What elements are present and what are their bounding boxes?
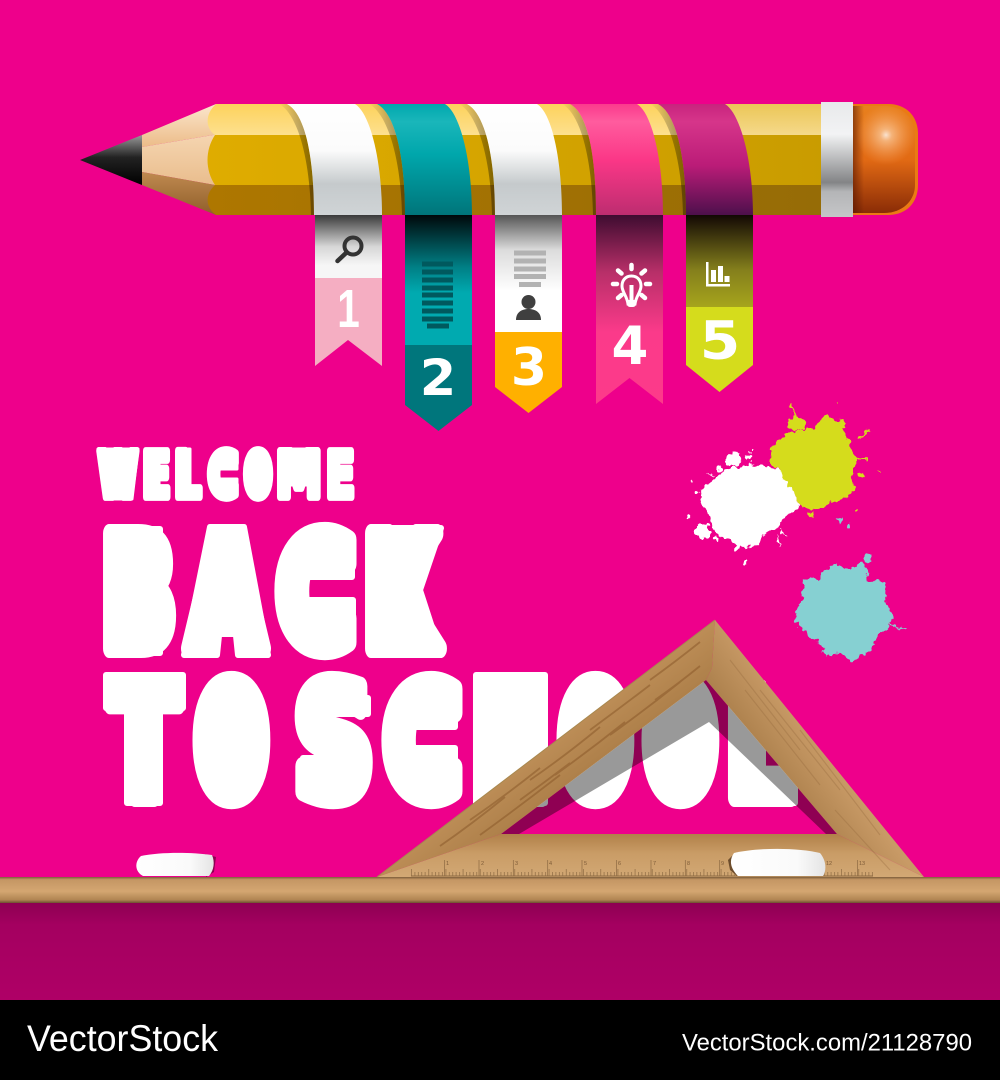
pencil ribbon 3 white — [467, 104, 562, 215]
set square right arm — [706, 620, 924, 877]
ruler numbers: 13 — [859, 861, 865, 867]
pencil ribbon 1 white — [287, 104, 382, 215]
pencil tip wood — [142, 104, 226, 215]
teal splat — [794, 519, 906, 663]
chalk ledge board — [0, 877, 1000, 903]
ruler numbers: 8 — [687, 861, 690, 867]
title text: to school: L — [724, 651, 794, 835]
ruler numbers — [446, 861, 865, 867]
title text: back — [100, 503, 441, 687]
watermark right: VectorStock.com/21128790 — [682, 1030, 972, 1056]
ruler numbers: 6 — [618, 861, 621, 867]
title text: welcome: E — [326, 439, 355, 512]
title text: back: A — [187, 504, 266, 687]
pencil lead — [80, 135, 142, 185]
ruler numbers: 1 — [446, 861, 449, 867]
title text: to school: S — [293, 652, 374, 836]
ribbon shadows on pencil — [279, 104, 686, 215]
left chalk — [136, 853, 216, 877]
title text: welcome: O — [243, 439, 273, 513]
title text: to school: O — [193, 652, 269, 836]
pencil ribbon 4 pink — [570, 104, 663, 215]
title text: back: B — [100, 503, 177, 687]
title text: to school: O — [557, 652, 633, 836]
icon: magnifier — [338, 238, 362, 261]
ruler numbers: 9 — [721, 861, 724, 867]
watermark bar — [0, 1000, 1000, 1080]
icon: lightbulb — [613, 265, 650, 307]
number 4: 4 — [612, 316, 648, 377]
paint splatters — [687, 403, 906, 663]
ribbon 3 with person — [495, 215, 562, 413]
ribbon 4 with lightbulb — [596, 215, 663, 404]
floor — [0, 900, 1000, 1000]
ribbon 5 with chart — [686, 215, 753, 392]
ruler numbers: 3 — [515, 861, 518, 867]
title text: to school: T — [110, 652, 180, 835]
pencil metal ferrule — [821, 102, 853, 217]
ruler numbers: 5 — [584, 861, 587, 867]
ribbon 1 with magnifier — [315, 215, 382, 366]
lime splat — [770, 403, 880, 517]
title text: to school — [106, 651, 795, 836]
set square left arm — [377, 620, 715, 877]
pencil — [80, 102, 918, 217]
title text: welcome: W — [97, 440, 139, 513]
number 1: 1 — [337, 279, 360, 339]
icon: person — [516, 295, 541, 320]
icon: text lines — [422, 264, 453, 326]
title text: to school: O — [642, 652, 718, 836]
icon: text lines — [514, 253, 546, 284]
right chalk — [728, 849, 825, 876]
icon: bar chart — [706, 262, 730, 286]
triangle shadow — [501, 680, 837, 834]
title text: to school: H — [470, 651, 551, 835]
ribbon 2 with text lines — [405, 215, 472, 431]
title text: back: C — [276, 503, 357, 687]
title text: back: K — [362, 503, 441, 687]
pencil ribbon 5 purple — [658, 104, 753, 215]
ruler numbers: 7 — [653, 861, 656, 867]
white splat — [687, 450, 798, 565]
pencil eraser — [852, 104, 918, 215]
number 2: 2 — [420, 349, 456, 408]
title text: welcome: L — [174, 438, 201, 512]
set square bottom bar with ruler — [377, 834, 924, 877]
title text: welcome: C — [207, 439, 239, 512]
pencil yellow body — [208, 104, 825, 215]
title text: welcome — [97, 438, 355, 513]
ruler numbers: 2 — [481, 861, 484, 867]
ruler numbers: 4 — [549, 861, 552, 867]
number 5: 5 — [700, 310, 740, 372]
title text: welcome: M — [276, 439, 322, 513]
title text: welcome: E — [142, 439, 171, 512]
wooden set square — [377, 620, 924, 877]
number 3: 3 — [511, 338, 547, 398]
watermark left: VectorStock — [27, 1018, 218, 1059]
ruler numbers: 12 — [826, 861, 832, 867]
pencil ribbon 2 teal — [377, 104, 472, 215]
title text: to school: C — [382, 652, 463, 836]
